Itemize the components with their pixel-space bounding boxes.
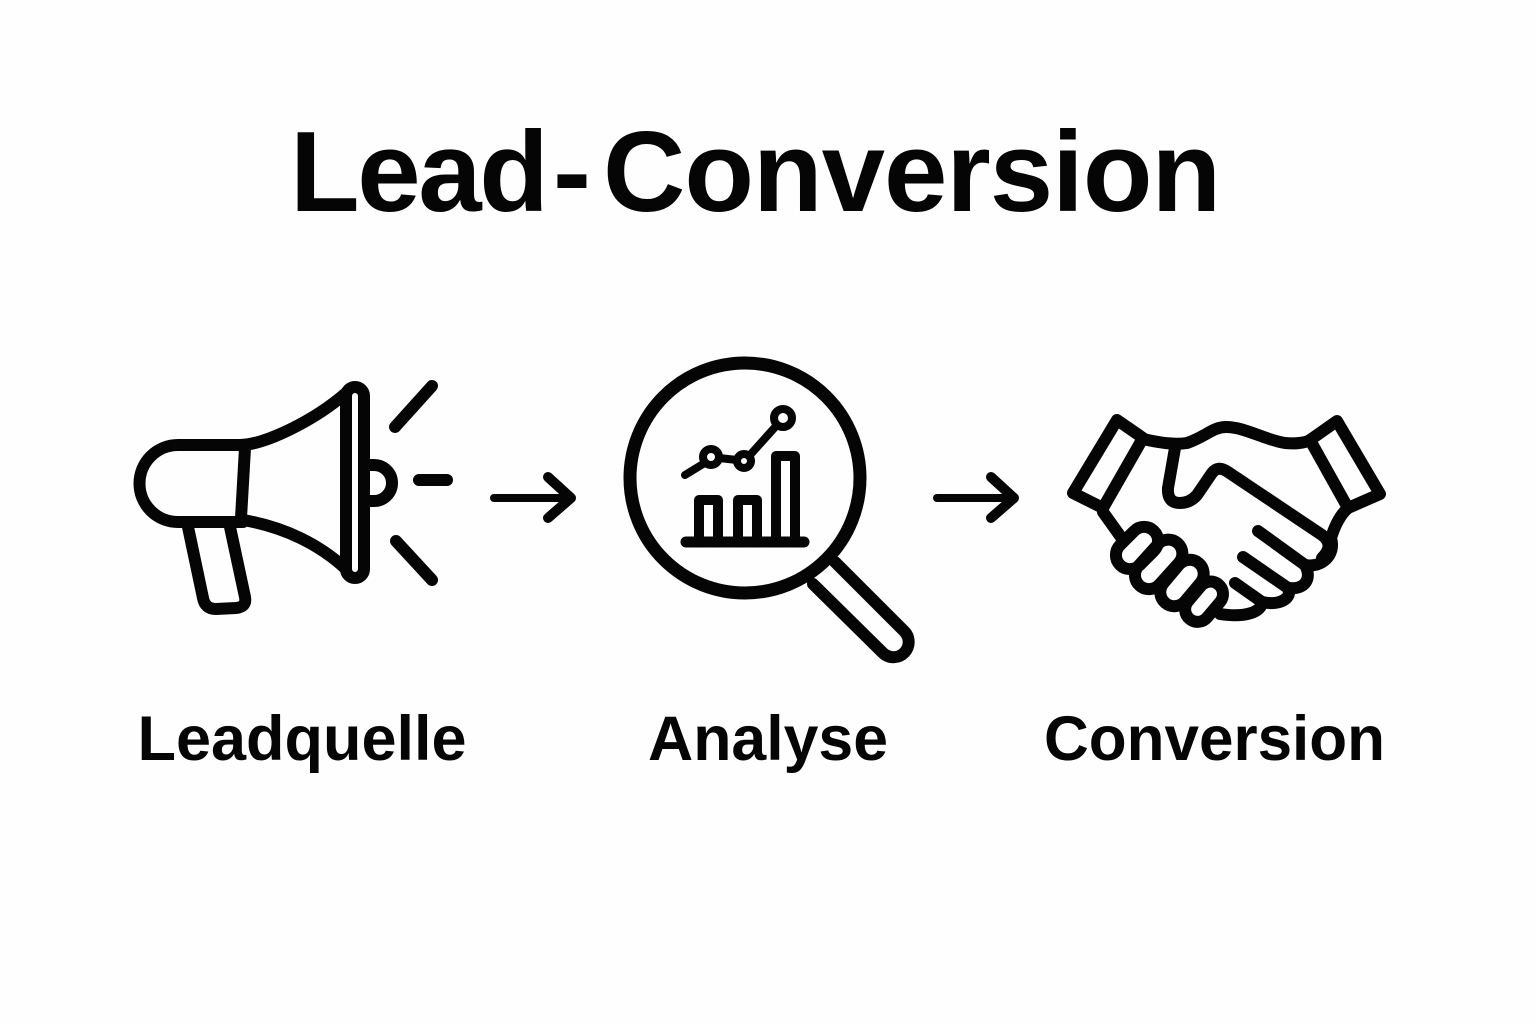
icon: handshake [1073, 420, 1380, 627]
icon: megaphone [140, 386, 447, 609]
label: Conversion: Conversion [1044, 704, 1385, 774]
arrow: Analyse to Conversion [937, 477, 1014, 518]
title: Lead [290, 109, 546, 236]
arrow: Leadquelle to Analyse [494, 477, 571, 518]
title: Conversion [603, 109, 1220, 236]
title: - [553, 109, 591, 236]
icon: magnifying glass with chart [630, 363, 909, 657]
label: Leadquelle: Leadquelle [138, 704, 467, 774]
label: Analyse: Analyse [648, 704, 888, 774]
